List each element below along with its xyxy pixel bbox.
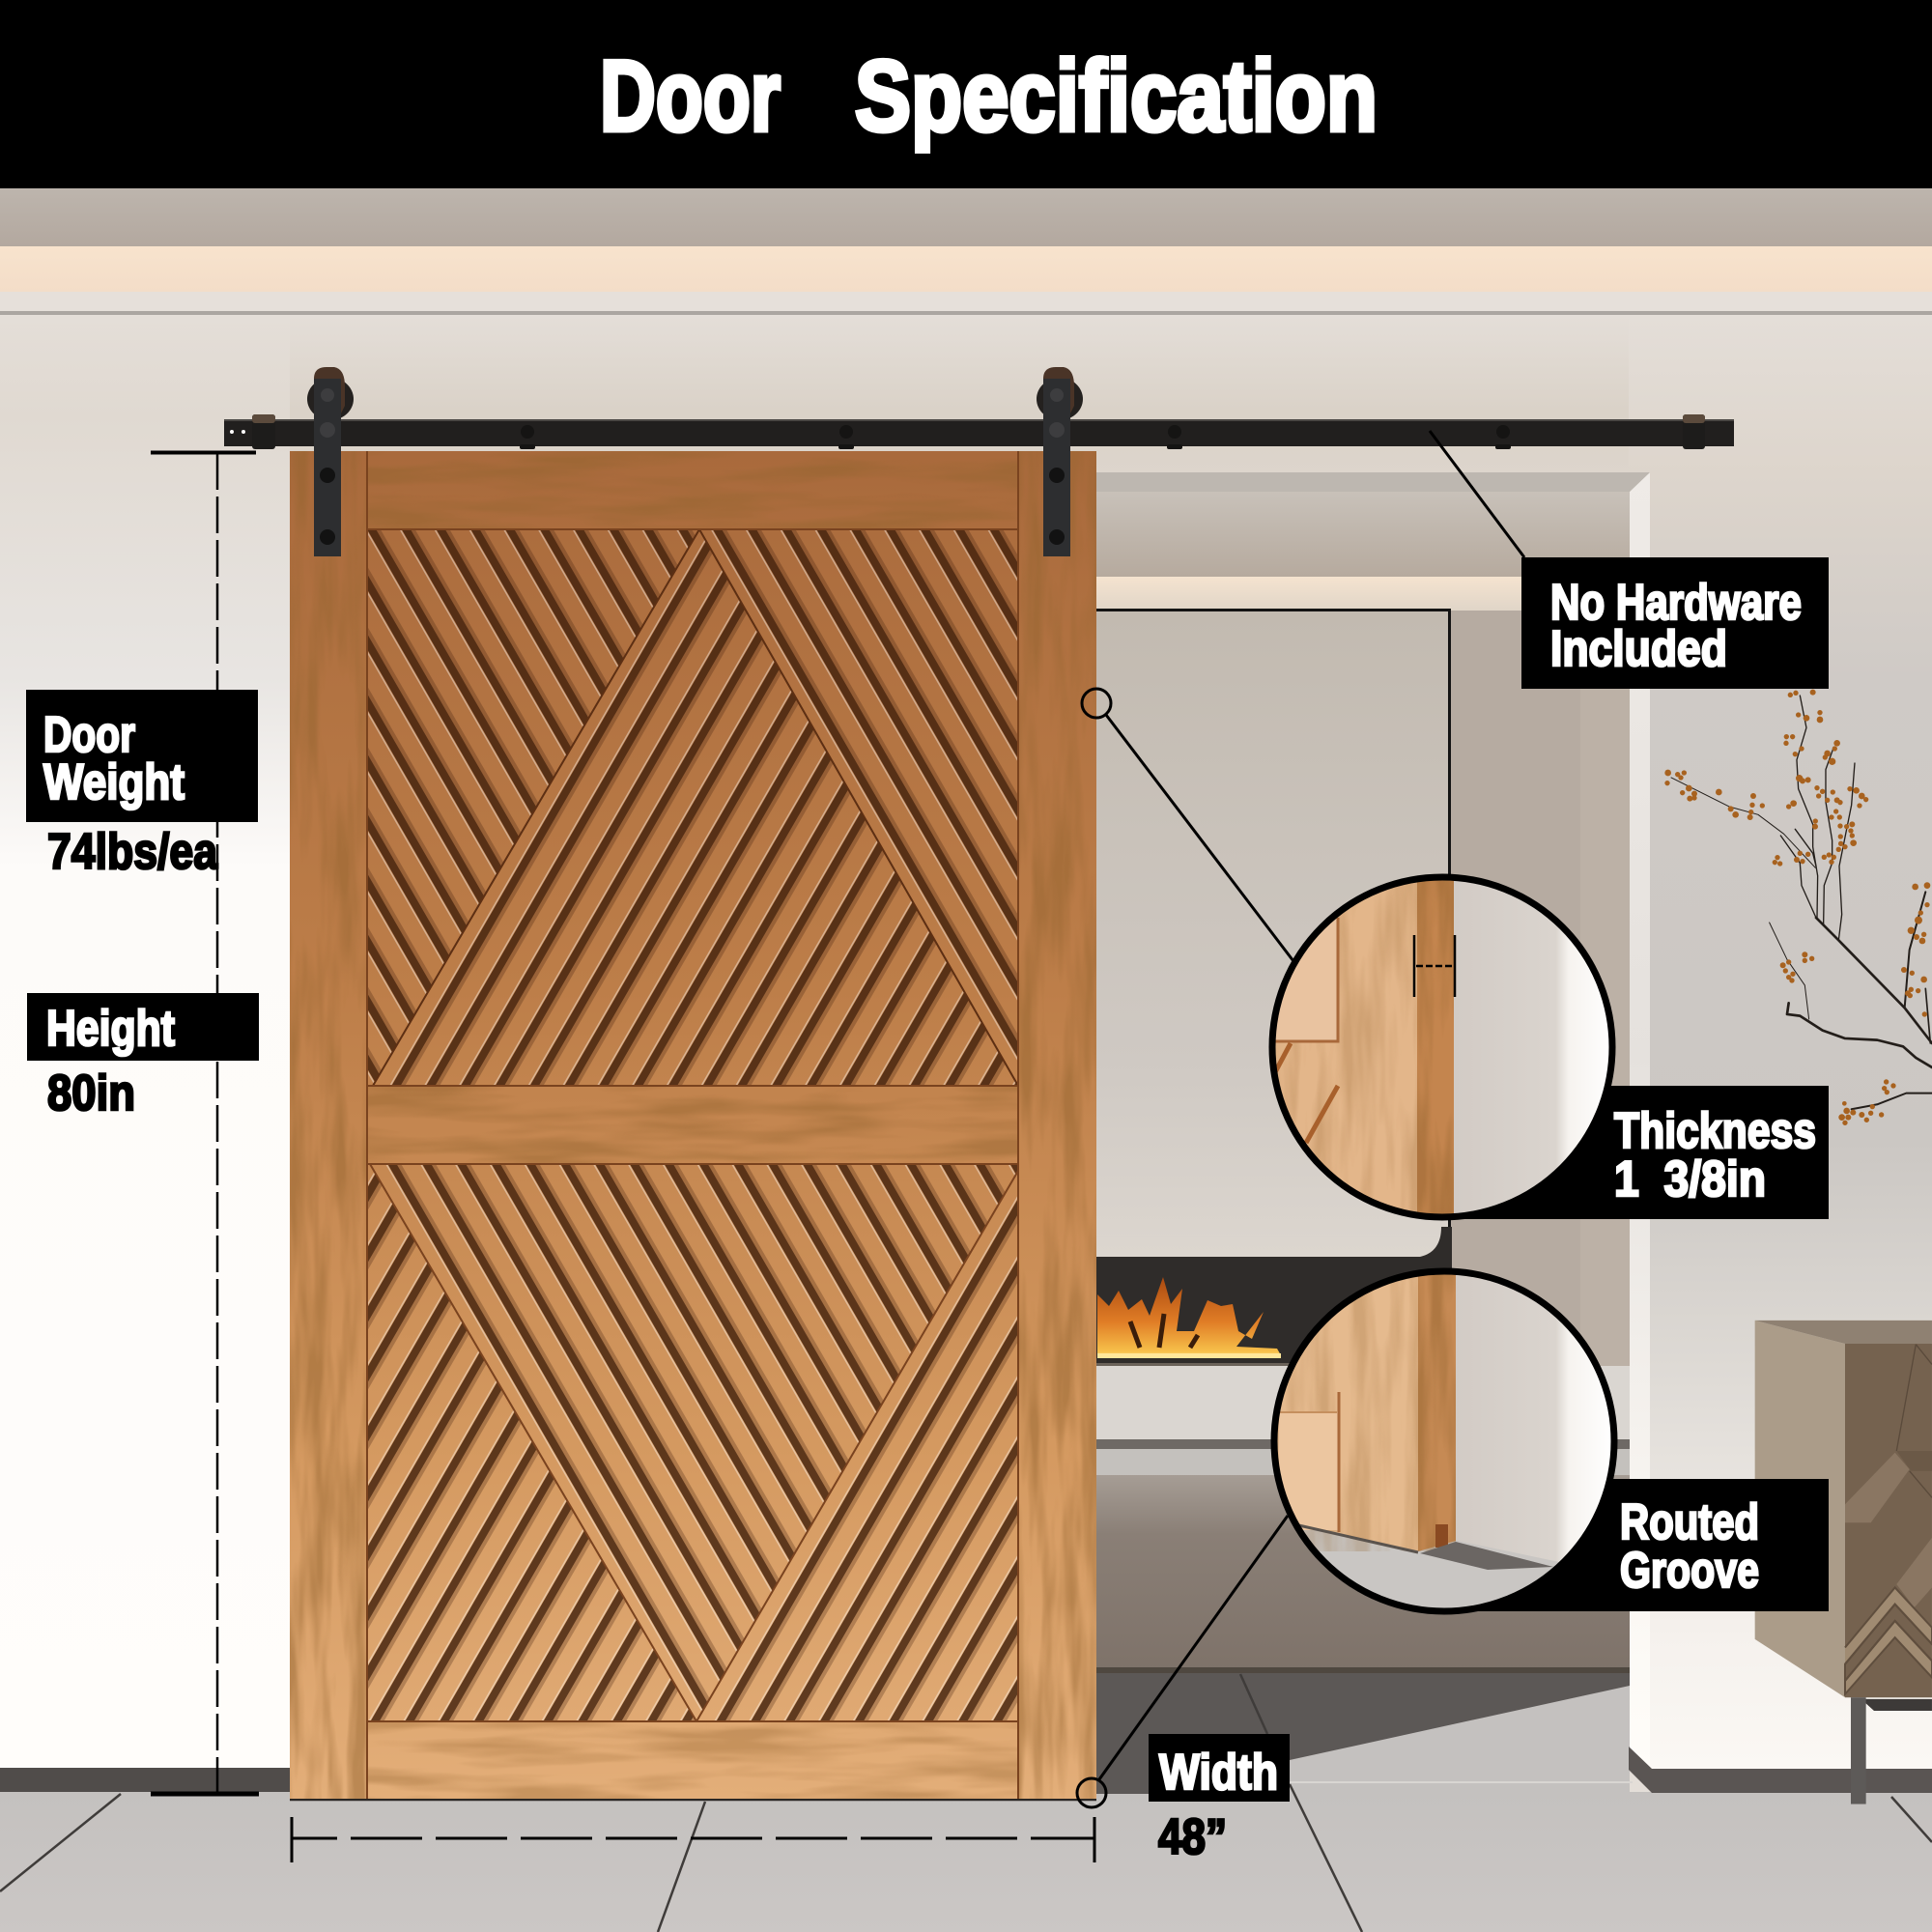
width dimension line — [292, 1817, 1094, 1862]
lower slat panel — [367, 1164, 1018, 1721]
decorative branches with berries — [1664, 690, 1932, 1125]
label: thickness — [1449, 1086, 1829, 1219]
label: no hardware included — [1521, 557, 1829, 689]
label: width: Width — [1159, 1745, 1278, 1801]
right hanger strap and wheel — [1037, 367, 1083, 556]
label: height — [27, 993, 259, 1061]
baseboards — [0, 1747, 1932, 1793]
upper slat panel — [367, 529, 1018, 1086]
title text — [600, 41, 1378, 153]
label: no hardware included: Included — [1550, 621, 1727, 677]
cabinet — [1755, 1321, 1932, 1804]
door frame stiles and rails — [290, 451, 1096, 1799]
label: routed groove — [1449, 1479, 1829, 1611]
label: thickness: 1 3/8in — [1614, 1151, 1766, 1208]
label: height: Height — [46, 1001, 175, 1057]
leader line: thickness — [1082, 689, 1293, 961]
label: no hardware included: No Hardware — [1550, 575, 1802, 631]
leader line: hardware — [1430, 431, 1524, 557]
value: height: 80in — [47, 1065, 135, 1122]
title text: Door — [600, 41, 781, 153]
label: routed groove: Routed — [1620, 1494, 1759, 1550]
height dimension line — [151, 452, 259, 1795]
label: door weight: Weight — [43, 754, 185, 810]
floor — [0, 1673, 1932, 1932]
label: door weight: Door — [43, 707, 135, 763]
detail circle: door thickness — [1271, 875, 1618, 1221]
detail circle: routed groove — [1271, 1269, 1619, 1617]
doorway interior — [1096, 472, 1650, 1673]
value: door weight: 74lbs/ea — [47, 824, 218, 880]
leader line: width and groove — [1077, 1516, 1288, 1807]
fireplace — [1096, 1227, 1452, 1366]
sliding track rail — [224, 414, 1734, 449]
title text: Specification — [855, 41, 1378, 153]
title bar — [0, 0, 1932, 188]
left hanger strap and wheel — [307, 367, 354, 556]
label: door weight — [26, 690, 258, 822]
barn door — [290, 451, 1096, 1799]
label: thickness: Thickness — [1614, 1103, 1816, 1159]
label: routed groove: Groove — [1620, 1543, 1759, 1599]
value: width: 48” — [1158, 1809, 1227, 1865]
